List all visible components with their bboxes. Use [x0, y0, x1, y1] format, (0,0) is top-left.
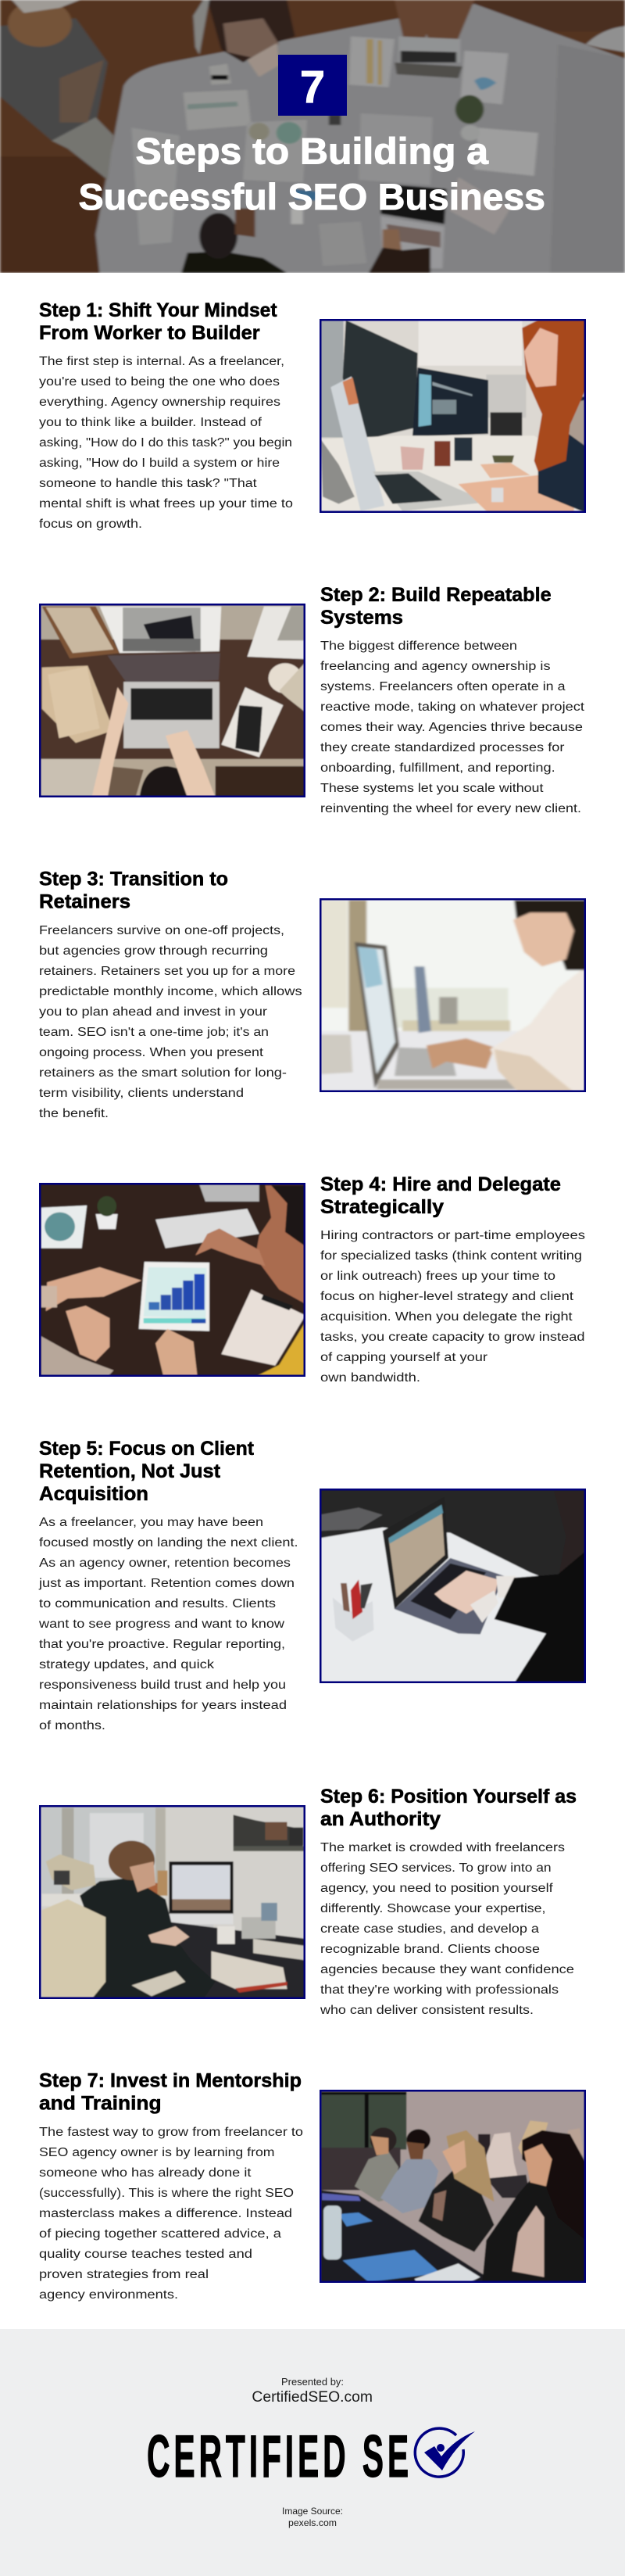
heading: step 1: Step 1: Shift Your Mindset: [39, 299, 277, 321]
text block: step 6: create case studies, and develop a: [320, 1922, 539, 1936]
text block: step 1: focus on growth.: [39, 518, 142, 531]
text block: step 3: team. SEO isn't a one-time job; it's an: [39, 1026, 269, 1039]
text block: step 7: masterclass makes a difference. Instead: [39, 2207, 292, 2220]
title: Successful SEO Business: [78, 176, 545, 217]
text block: step 3: but agencies grow through recurring: [39, 944, 268, 958]
text block: step 5: maintain relationships for years instead: [39, 1699, 287, 1712]
presented by text: [252, 2377, 373, 2406]
text block: step 7: of piecing together scattered advice, a: [39, 2227, 281, 2241]
heading: step 6: an Authority: [320, 1808, 441, 1830]
text block: step 6: The market is crowded with freelancers: [320, 1841, 565, 1854]
heading: step 2: [320, 584, 552, 629]
text block: step 6: recognizable brand. Clients choose: [320, 1943, 540, 1956]
text block: step 4: Hiring contractors or part-time employees: [320, 1229, 585, 1242]
photo: woman with red hair at computer monitors: [320, 319, 586, 513]
text block: step 2: [320, 640, 585, 815]
heading: step 4: [320, 1173, 561, 1218]
text block: step 2: onboarding, fulfillment, and reporting.: [320, 761, 555, 775]
heading: step 2: Systems: [320, 607, 403, 629]
photo: man working at desktop computer in home office: [39, 1805, 305, 1999]
text block: step 7: agency environments.: [39, 2288, 178, 2302]
photo: hands typing on laptop at white round table: [320, 1489, 586, 1683]
text block: step 2: comes their way. Agencies thrive because: [320, 721, 583, 734]
panel: step 4: [39, 1173, 585, 1385]
heading: step 1: [39, 299, 277, 344]
title: [78, 130, 545, 217]
text block: step 5: As a freelancer, you may have been: [39, 1516, 263, 1529]
text block: step 1: The first step is internal. As a freelancer,: [39, 355, 284, 368]
text block: step 7: someone who has already done it: [39, 2166, 252, 2180]
text block: step 2: The biggest difference between: [320, 640, 517, 653]
hero photo: team meeting table from above: [0, 0, 625, 273]
number badge: 7: 7: [300, 62, 325, 113]
text block: step 7: proven strategies from real: [39, 2268, 209, 2281]
bottom right laptop: [380, 184, 446, 224]
image source text: [282, 2506, 343, 2528]
text block: step 4: own bandwidth.: [320, 1371, 420, 1385]
heading: step 3: Retainers: [39, 891, 130, 913]
text block: step 7: SEO agency owner is by learning from: [39, 2146, 275, 2159]
text block: step 6: agency, you need to position yourself: [320, 1882, 553, 1895]
text block: step 5: focused mostly on landing the next client.: [39, 1536, 298, 1550]
photo: laptop on wooden desk from above: [39, 604, 305, 797]
text block: step 6: [320, 1841, 574, 2017]
text block: step 3: retainers as the smart solution for long-: [39, 1066, 287, 1080]
heading: step 7: Step 7: Invest in Mentorship: [39, 2070, 302, 2092]
text block: step 4: tasks, you create capacity to grow instead: [320, 1331, 584, 1344]
text block: step 4: focus on higher-level strategy and client: [320, 1290, 574, 1303]
photo: tablet with bar chart on dark table: [39, 1183, 305, 1377]
text block: step 1: you to think like a builder. Instead of: [39, 416, 262, 429]
text block: step 3: retainers. Retainers set you up for a more: [39, 965, 295, 978]
panel: footer: [0, 2329, 625, 2576]
text block: step 1: everything. Agency ownership requires: [39, 396, 280, 409]
heading: step 4: Step 4: Hire and Delegate: [320, 1173, 561, 1195]
text block: step 1: asking, "How do I build a system or hire: [39, 457, 280, 470]
text block: step 6: offering SEO services. To grow into an: [320, 1861, 552, 1875]
image source text: pexels.com: [288, 2517, 337, 2528]
panel: step 6: [39, 1786, 577, 2017]
text block: step 5: strategy updates, and quick: [39, 1658, 214, 1671]
text block: step 1: mental shift is what frees up your time to: [39, 497, 293, 511]
text block: step 3: predictable monthly income, which allows: [39, 985, 302, 998]
text block: step 3: ongoing process. When you present: [39, 1046, 264, 1059]
icon: circular check mark: [415, 2428, 475, 2477]
heading: step 1: From Worker to Builder: [39, 322, 260, 344]
heading: step 3: Step 3: Transition to: [39, 868, 228, 890]
centre objects: [455, 95, 484, 124]
heading: step 2: Step 2: Build Repeatable: [320, 584, 552, 606]
panel: step 3: [39, 868, 586, 1120]
heading: step 3: [39, 868, 228, 913]
text block: step 3: the benefit.: [39, 1107, 109, 1120]
presented by text: CertifiedSEO.com: [252, 2388, 373, 2406]
text block: step 3: [39, 924, 302, 1120]
text block: step 4: or link outreach) frees up your time to: [320, 1270, 555, 1283]
bottom people: [181, 252, 287, 273]
text block: step 5: that you're proactive. Regular reporting,: [39, 1638, 285, 1651]
text block: step 6: who can deliver consistent results.: [320, 2004, 534, 2017]
text block: step 5: just as important. Retention comes down: [38, 1577, 295, 1590]
heading: step 5: Step 5: Focus on Client: [39, 1438, 255, 1460]
logo: Certified SEO: [147, 2424, 475, 2490]
text block: step 3: Freelancers survive on one-off projects,: [39, 924, 284, 937]
text block: step 6: agencies because they want confidence: [320, 1963, 574, 1976]
text block: step 6: differently. Showcase your expertise,: [320, 1902, 545, 1915]
panel: step 2: [39, 584, 585, 815]
text block: step 7: quality course teaches tested and: [39, 2248, 252, 2261]
text block: step 4: acquisition. When you delegate the right: [320, 1310, 573, 1324]
image source text: Image Source:: [282, 2506, 343, 2517]
text block: step 6: that they're working with professionals: [320, 1983, 559, 1997]
text block: step 4: [320, 1229, 585, 1385]
man with check shirt: [0, 18, 108, 141]
text block: step 1: asking, "How do I do this task?" you begin: [39, 436, 292, 450]
text block: step 1: [39, 355, 293, 531]
text block: step 5: [38, 1516, 298, 1732]
photo: people seated at conference table: [320, 2090, 586, 2283]
photo: woman typing on laptop in bright room: [320, 898, 586, 1092]
heading: step 6: [320, 1786, 577, 1830]
text block: step 5: want to see progress and want to know: [38, 1618, 285, 1631]
text block: step 5: responsiveness build trust and help you: [39, 1679, 286, 1692]
text block: step 2: freelancing and agency ownership is: [320, 660, 551, 673]
text block: step 5: As an agency owner, retention becomes: [39, 1557, 291, 1570]
panel: step 7: [39, 2070, 586, 2302]
heading: step 5: Acquisition: [39, 1483, 148, 1505]
text block: step 7: (successfully). This is where the right SEO: [39, 2187, 294, 2200]
top centre person: [207, 0, 295, 63]
top right person and laptop: [395, 0, 474, 60]
text block: step 2: systems. Freelancers often operate in a: [320, 680, 566, 693]
title: Steps to Building a: [136, 130, 489, 172]
panel: step 5: [38, 1438, 586, 1732]
text block: step 5: to communication and results. Clients: [39, 1597, 276, 1610]
text block: step 7: The fastest way to grow from freelancer to: [39, 2126, 303, 2139]
panel: step 1: [39, 299, 586, 531]
text block: step 1: someone to handle this task? "That: [39, 477, 257, 490]
text block: step 3: you to plan ahead and invest in your: [39, 1005, 267, 1019]
papers: [348, 37, 395, 88]
heading: step 5: [39, 1438, 255, 1505]
text block: step 2: reactive mode, taking on whatever project: [320, 700, 585, 714]
panel: hero header: [0, 0, 625, 273]
heading: step 5: Retention, Not Just: [39, 1460, 221, 1482]
heading: step 6: Step 6: Position Yourself as: [320, 1786, 577, 1807]
heading: step 7: [39, 2070, 302, 2114]
text block: step 2: they create standardized processes for: [320, 741, 564, 754]
text block: step 2: These systems let you scale without: [320, 782, 544, 795]
text block: step 7: [39, 2126, 303, 2302]
text block: step 4: for specialized tasks (think content writing: [320, 1249, 582, 1263]
heading: step 4: Strategically: [320, 1196, 444, 1218]
heading: step 7: and Training: [39, 2092, 162, 2114]
text block: step 3: term visibility, clients understand: [39, 1087, 244, 1100]
text block: step 5: of months.: [39, 1719, 105, 1732]
number badge: 7: [278, 55, 347, 116]
text block: step 4: of capping yourself at your: [320, 1351, 488, 1364]
presented by text: Presented by:: [281, 2377, 344, 2388]
text block: step 2: reinventing the wheel for every new client.: [320, 802, 581, 815]
text block: step 1: you're used to being the one who does: [39, 375, 280, 389]
